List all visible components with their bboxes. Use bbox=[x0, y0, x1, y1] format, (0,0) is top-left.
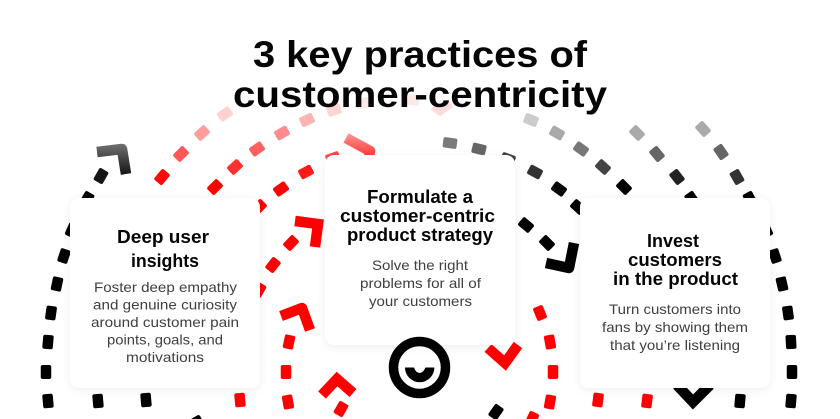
arrow: red, behind center card bbox=[346, 138, 370, 175]
text: invest description bbox=[602, 301, 748, 353]
arrow: red up-right bbox=[295, 221, 318, 247]
text: deep user insights description: Foster deep empathy bbox=[94, 279, 237, 295]
heading: formulate a customer-centric product strategy: product strategy bbox=[347, 225, 493, 245]
grey arc 4 joining right black arc bbox=[694, 120, 797, 408]
left outer black arc bbox=[41, 167, 109, 408]
chevron: red down bbox=[488, 345, 518, 363]
heading: deep user insights bbox=[117, 227, 209, 271]
red arc with arrow, upper bbox=[234, 234, 300, 407]
red arc right of smile bbox=[524, 305, 558, 419]
text: deep user insights description: points, goals, and bbox=[107, 332, 223, 348]
grey arc 2 bbox=[523, 113, 633, 196]
red arc fading upward, outer bbox=[153, 106, 234, 186]
panel: deep user insights bbox=[70, 198, 260, 388]
heading: invest customers in the product bbox=[613, 231, 738, 289]
bottom black dash right bbox=[734, 394, 746, 408]
text: invest description: that you’re listening bbox=[610, 337, 740, 353]
text: invest description: fans by showing them bbox=[602, 319, 748, 335]
red dash below chevron bbox=[333, 400, 349, 418]
text: strategy description: Solve the right bbox=[372, 257, 468, 273]
text: strategy description: your customers bbox=[369, 293, 472, 309]
heading: invest customers in the product: in the product bbox=[613, 269, 738, 289]
heading: formulate a customer-centric product strategy: customer-centric bbox=[340, 206, 495, 226]
heading: invest customers in the product: customers bbox=[628, 250, 722, 270]
arrow: red up-right lower bbox=[281, 308, 310, 330]
panel: invest customers in the product bbox=[580, 198, 770, 388]
red arc with arrow, lower bbox=[281, 334, 296, 410]
red arc, inner bbox=[250, 151, 341, 216]
bottom red dashes right bbox=[592, 392, 653, 409]
red arc fading upward, middle bbox=[206, 94, 419, 196]
arrow: grey top-left bbox=[97, 149, 126, 174]
text: deep user insights description: and genuine curiosity bbox=[93, 296, 237, 312]
grey arc with black arrow, right of center bbox=[442, 137, 587, 252]
heading: invest customers in the product: Invest bbox=[647, 231, 699, 251]
text: strategy description: problems for all of bbox=[360, 275, 481, 291]
chevron: black down bbox=[677, 385, 710, 402]
title: 3 key practices of bbox=[253, 34, 588, 75]
heading: deep user insights: Deep user bbox=[117, 227, 209, 247]
grey arc 3 bbox=[628, 124, 700, 208]
left inner black dashes bbox=[92, 393, 206, 419]
text: deep user insights description bbox=[91, 279, 239, 365]
arrow: black down-right bbox=[546, 243, 574, 268]
text: deep user insights description: around customer pain bbox=[91, 314, 239, 330]
title: customer-centricity bbox=[233, 74, 607, 115]
chevron: red up bbox=[322, 379, 353, 395]
pink chevron under title bbox=[433, 104, 451, 112]
text: deep user insights description: motivations bbox=[126, 349, 204, 365]
text: strategy description bbox=[360, 257, 481, 309]
text: invest description: Turn customers into bbox=[609, 301, 741, 317]
panel: customer-centric product strategy bbox=[325, 155, 515, 345]
heading: deep user insights: insights bbox=[131, 251, 199, 271]
title bbox=[233, 34, 607, 115]
black dash bottom center bbox=[488, 403, 504, 419]
heading: formulate a customer-centric product strategy: Formulate a bbox=[367, 187, 474, 207]
heading: formulate a customer-centric product strategy bbox=[340, 187, 495, 245]
